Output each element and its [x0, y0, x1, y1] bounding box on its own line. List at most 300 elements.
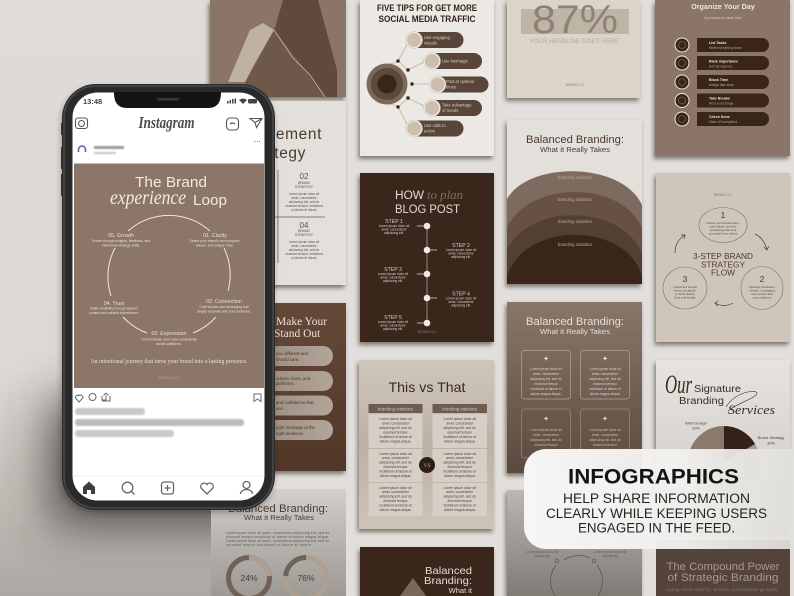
pie label: web design: Web Design	[685, 420, 707, 426]
highlight band	[521, 9, 629, 34]
box 4	[580, 409, 630, 458]
row: block time: Assign task slots	[709, 83, 734, 87]
step 2 oval: Develop consistent	[749, 285, 775, 289]
heading	[666, 561, 780, 584]
heading	[693, 251, 753, 278]
right column: Lorem ipsum dolor sit	[443, 452, 476, 456]
brand footer: BRAND CO	[418, 330, 436, 334]
banner body: ENGAGED IN THE FEED.	[578, 520, 735, 536]
arrows	[675, 234, 769, 306]
heading: Signature	[694, 384, 741, 395]
panel: signature branding services card	[656, 360, 790, 532]
text block: item 04: adipiscing elit, sed do	[289, 248, 319, 252]
right column: amet, consectetur	[446, 422, 474, 426]
box 1: ✦	[543, 355, 549, 363]
heading: how to plan blog post	[395, 187, 463, 216]
pie label: web design	[685, 420, 707, 430]
left column: dolore magna aliqua.	[380, 508, 411, 512]
box 2: amet, consectetur	[592, 372, 619, 376]
box 2: ✦	[602, 355, 608, 363]
right column: amet, consectetur	[446, 490, 474, 494]
step 4: adipiscing elit.	[451, 304, 471, 308]
label: connection: 02. Connection	[206, 299, 242, 305]
step 3: adipiscing elit.	[383, 279, 403, 283]
left column: dolore magna aliqua.	[380, 440, 411, 444]
tip 5 pill: Use calls to	[424, 123, 446, 128]
heading: STRATEGY	[701, 260, 745, 270]
body copy: eiusmod tempor incididunt ut labore et dolore magna aliqua.	[226, 535, 329, 539]
post menu dots: ···	[254, 139, 261, 146]
heading: five tips: SOCIAL MEDIA TRAFFIC	[378, 14, 476, 25]
text block: item 04: Lorem ipsum dolor sit	[289, 240, 319, 244]
right column: incididunt ut labore et	[444, 470, 476, 474]
right column: dolore magna aliqua.	[444, 508, 476, 512]
left column: incididunt ut labore et	[379, 470, 412, 474]
text block: item 04: amet, consectetur	[291, 244, 318, 248]
step 5	[378, 315, 408, 331]
text block: item 02	[285, 172, 323, 212]
panel: 87 percent card	[507, 0, 640, 98]
label: clarity: 01. Clarity	[203, 233, 227, 239]
pie label: brand strategy: Brand Strategy	[758, 435, 784, 440]
heading: engagement strategy: Strategy	[243, 145, 306, 162]
step 1: STEP 1	[385, 219, 403, 225]
box 2: eiusmod tempor	[593, 382, 618, 386]
text block: item 02: adipiscing elit, sed do	[289, 200, 319, 204]
label: expression: 03. Expression	[151, 331, 187, 337]
step 5: STEP 5	[384, 315, 402, 321]
row: take breaks	[675, 94, 769, 108]
post title script: experience	[110, 187, 186, 209]
panel: organize your day card	[655, 0, 790, 156]
text block: item 04: eiusmod tempor incididunt	[285, 252, 323, 256]
left column: amet, consectetur	[382, 456, 410, 460]
row: rank importance: Rank Importance	[709, 60, 738, 64]
script word: our: Our	[665, 370, 693, 399]
label: growth	[92, 233, 150, 248]
option pills	[225, 346, 333, 440]
step 3 oval	[663, 267, 707, 309]
heading: What it	[449, 586, 473, 595]
connector lines	[387, 41, 430, 128]
panel: engagement strategy card	[228, 101, 346, 285]
body copy	[226, 531, 329, 547]
pill text: you different and	[276, 351, 309, 356]
row: list tasks	[675, 38, 769, 52]
label: growth: Evolve through insights, feedback, and	[92, 239, 150, 243]
labels: adipiscing	[602, 554, 618, 558]
label: trust: Build credibility through aligned	[91, 306, 138, 310]
arc labels	[558, 175, 592, 247]
box 4: amet, consectetur	[592, 433, 619, 437]
step 1 oval	[699, 208, 747, 242]
heading: of Strategic Branding	[668, 572, 778, 584]
left column: eiusmod tempor	[383, 499, 409, 503]
row: take breaks: Take Breaks	[709, 96, 730, 100]
icon: search	[122, 482, 134, 494]
label: expression: across platforms.	[156, 342, 182, 346]
phone body	[62, 84, 275, 510]
box 4: adipiscing elit, sed do	[589, 438, 621, 442]
right column: dolore magna aliqua.	[444, 474, 476, 478]
step 1 oval: 1	[721, 210, 726, 220]
pie label: brand strategy: 30%	[767, 440, 775, 446]
triangle	[400, 578, 426, 596]
panel: five tips card	[360, 0, 494, 156]
icon: send	[250, 118, 262, 128]
row: check done	[675, 112, 769, 126]
box 1: eiusmod tempor	[534, 382, 559, 386]
step 5: Lorem ipsum dolor sit	[378, 320, 408, 324]
panel: abstract mountain card	[210, 0, 346, 97]
box 3: amet, consectetur	[533, 433, 560, 437]
notch	[114, 92, 221, 108]
post action icons	[75, 393, 261, 402]
step 4	[446, 292, 476, 308]
panel: layered arcs card	[507, 120, 642, 284]
right column: adipiscing elit, sed do	[443, 460, 476, 464]
step 3: amet, consectetur	[380, 276, 407, 280]
banner heading: INFOGRAPHICS	[568, 466, 739, 488]
body copy: Lorem ipsum dolor sit amet, consectetur adipiscing elit, sed do	[226, 539, 329, 543]
phone mockup	[61, 84, 275, 510]
right column: branding statistics	[442, 406, 478, 411]
step 3 oval: Implement across	[673, 285, 697, 289]
step 1 oval: Define your brand vision,	[706, 221, 740, 225]
step 2 oval: and content that	[751, 292, 773, 296]
left column: amet, consectetur	[382, 422, 410, 426]
right column: eiusmod tempor	[448, 465, 473, 469]
text block: item 02: 02	[300, 172, 309, 181]
tip 3 pill: times	[446, 84, 456, 90]
box 1: dolore magna aliqua.	[531, 392, 561, 396]
heading: five tips	[377, 3, 477, 25]
heading: Organize Your Day	[691, 2, 755, 11]
heading: engagement strategy	[228, 126, 322, 162]
step 3 oval: trust and loyalty	[674, 296, 696, 300]
tip 4 pill	[424, 100, 482, 116]
status time: 13:48	[83, 97, 102, 106]
text block: item 02: amet, consectetur	[291, 196, 318, 200]
box 2: incididunt ut labore et	[589, 387, 621, 391]
tip 3 pill: Post at optimal	[446, 79, 474, 84]
step 4: amet, consectetur	[448, 300, 475, 304]
arc labels: branding statistics	[558, 197, 592, 202]
pie label: brand strategy	[758, 435, 784, 446]
step 2: amet, consectetur	[448, 252, 475, 256]
donut: 76%: 76%	[297, 573, 315, 583]
label: clarity	[190, 233, 241, 248]
background	[0, 350, 211, 596]
pill text	[276, 351, 316, 436]
tip 1 pill: visuals	[424, 40, 437, 46]
connector dots	[396, 59, 414, 109]
heading: Branding:	[424, 575, 472, 587]
step 4: STEP 4	[452, 292, 470, 298]
arc labels: branding statistics	[558, 219, 592, 224]
label: connection	[197, 299, 251, 314]
right column: adipiscing elit, sed do	[443, 426, 476, 430]
instagram wordmark: Instagram	[138, 113, 194, 132]
box 1: Lorem ipsum dolor sit	[530, 367, 562, 371]
step 1 oval: positioning that sets	[710, 228, 737, 232]
body copy: Lorem ipsum dolor sit amet, consectetur adipiscing elit, sed do	[226, 531, 329, 535]
step 5: amet, consectetur	[380, 324, 407, 328]
left column: eiusmod tempor	[383, 430, 409, 434]
tip 4 pill: of trends	[442, 108, 458, 113]
text block: item 02: eiusmod tempor incididunt	[285, 204, 323, 208]
panel: grey circular process card	[507, 490, 642, 596]
labels	[526, 550, 626, 558]
heading: how to plan blog post: BLOG POST	[395, 204, 460, 216]
panel: this vs that card	[359, 360, 494, 529]
heading: 3-STEP BRAND	[693, 251, 753, 261]
post author bars	[94, 146, 124, 154]
panel: how to plan blog post card	[360, 173, 494, 342]
label: growth: 05. Growth	[108, 233, 134, 239]
step 3 oval: 3	[683, 274, 688, 284]
box 4: ✦	[602, 415, 608, 423]
icon: profile	[240, 482, 252, 494]
text block: item 02: ut labore et dolore	[291, 208, 317, 212]
step 2 oval: your audience	[753, 296, 772, 300]
row: take breaks: Rest to recharge	[709, 102, 734, 106]
pill text: right audience.	[276, 431, 304, 436]
post tagline: An intentional journey that turns your brand into a lasting presence.	[90, 358, 248, 365]
step 2	[446, 243, 476, 259]
brand header: BRAND CO	[714, 193, 732, 197]
right column: adipiscing elit, sed do	[443, 494, 476, 498]
panel: 3-step brand strategy flow card	[656, 173, 790, 342]
pill text: ues.	[276, 406, 284, 411]
arc labels: branding statistics	[558, 175, 592, 180]
step 1	[379, 219, 409, 235]
row: list tasks: Write everything down	[709, 46, 742, 50]
text block: item 02: BRAND	[298, 181, 310, 185]
phone rim	[64, 86, 273, 508]
icon: camera	[76, 118, 88, 128]
right column: incididunt ut labore et	[444, 435, 476, 439]
step 2: Lorem ipsum dolor sit	[446, 248, 476, 252]
step 3 oval: every touchpoint	[674, 288, 696, 292]
column dividers	[275, 170, 325, 263]
body copy: eiusmod tempor incididunt ut labore et dolore	[226, 543, 311, 547]
left column: adipiscing elit, sed do	[379, 494, 412, 498]
heading: how to plan blog post: HOW	[395, 190, 424, 202]
label: clarity: values, and unique voice.	[196, 244, 234, 248]
headline: YOUR HEADLINE GOES HERE	[530, 38, 619, 45]
box 3: Lorem ipsum dolor sit	[530, 428, 562, 432]
box 1: amet, consectetur	[533, 372, 560, 376]
tip 1 pill: Use engaging	[424, 35, 451, 40]
left column: Lorem ipsum dolor sit	[379, 417, 412, 421]
tip 4 pill: Take advantage	[442, 102, 472, 108]
label: clarity: Define your brand's core purpose,	[190, 239, 241, 243]
label: expression	[141, 331, 197, 346]
left column: amet, consectetur	[382, 490, 410, 494]
left column: adipiscing elit, sed do	[379, 426, 412, 430]
step 1 oval: core values, and the	[709, 224, 737, 228]
vs badge: VS	[423, 463, 431, 469]
label: trust	[89, 301, 139, 315]
script flourish	[726, 391, 757, 411]
heading: FLOW	[711, 268, 735, 278]
right column	[432, 404, 487, 516]
heading: make your brand stand out: Make Your	[276, 316, 327, 328]
row: check done: Mark off completed	[709, 120, 737, 124]
tip 2 pill	[424, 52, 482, 70]
banner body: HELP SHARE INFORMATION	[563, 491, 750, 506]
row: list tasks: List Tasks	[709, 41, 726, 45]
step 2 oval: 2	[760, 274, 765, 284]
tip 2 pill: Use hashtags	[442, 58, 468, 64]
right column: eiusmod tempor	[448, 499, 473, 503]
subheading: Long-term clarity drives consistent growth	[667, 587, 777, 592]
step 1: amet, consectetur	[381, 228, 408, 232]
step 2 oval	[741, 266, 783, 310]
left column: Lorem ipsum dolor sit	[379, 486, 412, 490]
label: trust: 04. Trust	[104, 301, 125, 307]
step 1 oval: you apart from others	[709, 232, 738, 236]
step 2: STEP 2	[452, 243, 470, 249]
left column: adipiscing elit, sed do	[379, 460, 412, 464]
left column: Lorem ipsum dolor sit	[379, 452, 412, 456]
step 3 oval: to build lasting	[675, 292, 695, 296]
right column: Lorem ipsum dolor sit	[443, 417, 476, 421]
box 1: adipiscing elit, sed do	[530, 377, 562, 381]
icon: tv	[226, 118, 238, 130]
row: block time	[675, 75, 769, 89]
text block: item 02: STRATEGY	[295, 185, 314, 189]
pill text: culture, fonts, and	[276, 376, 311, 381]
heading	[679, 384, 741, 407]
step 5: adipiscing elit.	[383, 327, 403, 331]
icon: heart	[201, 483, 213, 494]
row: rank importance	[675, 56, 769, 70]
text block: item 04: STRATEGY	[295, 233, 314, 237]
panel: compound power card	[656, 540, 790, 596]
panel: dark balanced branding card	[360, 547, 494, 596]
panel: balanced branding boxes card	[507, 302, 642, 473]
banner body	[546, 491, 767, 536]
donut: 24%: 24%	[240, 573, 258, 583]
caption placeholder bars	[75, 408, 244, 437]
box 2: dolore magna aliqua.	[590, 392, 620, 396]
tip 5 pill: action	[424, 128, 436, 134]
tip 5 pill	[406, 120, 464, 137]
left column: branding statistics	[378, 406, 414, 411]
script word: services: Services	[728, 402, 775, 417]
labels: Lorem ipsum dolor sit	[526, 550, 558, 554]
labels: Lorem ipsum dolor sit	[594, 550, 626, 554]
tip 1 pill	[406, 32, 464, 48]
icon: home	[83, 482, 95, 494]
side buttons	[61, 123, 64, 196]
heading: Balanced	[425, 565, 472, 577]
left column: incididunt ut labore et	[379, 435, 412, 439]
subheading: What it Really Takes	[244, 515, 315, 522]
subheading: What it Really Takes	[540, 147, 611, 154]
box 2: adipiscing elit, sed do	[589, 377, 621, 381]
speaker	[157, 98, 179, 100]
step 1: adipiscing elit.	[384, 231, 404, 235]
label: trust: content and reliable experiences.	[89, 311, 139, 315]
box 3: eiusmod tempor	[534, 443, 559, 447]
banner body: CLEARLY WHILE KEEPING USERS	[546, 506, 767, 521]
heading: This vs That	[388, 379, 466, 395]
heading: Balanced Branding:	[526, 316, 624, 328]
step 3	[378, 267, 408, 283]
callout banner	[524, 449, 794, 549]
brand footer: BRAND CO	[566, 83, 585, 87]
heading: Balanced Branding:	[228, 503, 328, 515]
box 1	[522, 350, 570, 399]
right column: incididunt ut labore et	[444, 504, 476, 508]
vs badge	[419, 457, 435, 473]
post title: The Brand	[135, 174, 207, 191]
hub circle	[366, 64, 408, 104]
heading: The Compound Power	[666, 561, 780, 573]
step 3: STEP 3	[384, 267, 402, 273]
step 4: Lorem ipsum dolor sit	[446, 296, 476, 300]
right column: eiusmod tempor	[448, 430, 473, 434]
text block: item 04: 04	[300, 221, 309, 230]
left column: incididunt ut labore et	[379, 504, 412, 508]
arc layers	[507, 171, 642, 284]
subheading: What it Really Takes	[540, 329, 611, 336]
heading: Balanced Branding:	[526, 134, 624, 146]
left column	[368, 404, 422, 516]
timeline	[417, 223, 437, 326]
step 1: Lorem ipsum dolor sit	[379, 224, 409, 228]
subheading: A process to save time	[704, 16, 742, 20]
labels: adipiscing	[534, 554, 550, 558]
pill text: should care.	[276, 357, 299, 362]
phone screen	[72, 92, 264, 500]
post avatar	[78, 146, 86, 152]
row: check done: Check Done	[709, 115, 730, 119]
text block: item 04	[285, 221, 323, 260]
label: connection: Craft visuals and messaging that	[199, 305, 249, 309]
box 3: ✦	[543, 415, 549, 423]
row: rank importance: Sort by urgency	[709, 64, 732, 68]
text block: item 04: BRAND	[298, 229, 310, 233]
right column: dolore magna aliqua.	[444, 440, 476, 444]
heading: five tips: FIVE TIPS FOR GET MORE	[377, 3, 477, 14]
box 4: Lorem ipsum dolor sit	[589, 428, 621, 432]
arc labels: branding statistics	[558, 242, 592, 247]
step 2 oval: visuals, messaging	[749, 288, 775, 292]
tip 3 pill	[429, 76, 488, 93]
pill text: and confidence that	[276, 400, 314, 405]
pill text: platforms.	[276, 381, 295, 386]
pill text: right message at the	[276, 425, 316, 430]
heading: Branding	[679, 396, 724, 407]
right column: Lorem ipsum dolor sit	[443, 486, 476, 490]
left column: eiusmod tempor	[383, 465, 409, 469]
icon: add	[162, 482, 174, 494]
box 2: Lorem ipsum dolor sit	[589, 367, 621, 371]
post image: brand experience loop	[74, 164, 264, 388]
bottom nav divider	[73, 475, 264, 477]
box 3	[522, 409, 570, 458]
row: block time: Block Time	[709, 78, 728, 82]
status icons	[227, 98, 257, 104]
post footer: BRAND CO	[158, 375, 180, 380]
panel: make your brand stand out card	[210, 303, 346, 471]
label: connection: deeply resonate with your audience.	[197, 310, 251, 314]
panel: balanced branding donuts card	[211, 489, 346, 596]
